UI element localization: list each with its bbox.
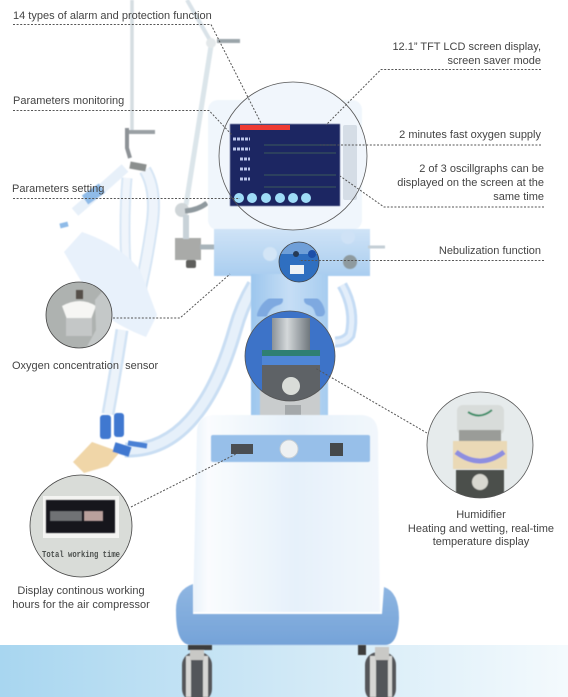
label: oscillographs: same time [493, 191, 544, 203]
breathing tubes [60, 165, 352, 450]
callout: working hours display photo: Total working time [42, 549, 120, 560]
label: LCD screen: screen saver mode [447, 55, 541, 67]
label: humidifier: temperature display [433, 536, 530, 548]
callout: humidifier photo [427, 392, 533, 500]
callout circle: touch screen [219, 82, 367, 230]
bottom gradient band [0, 645, 568, 697]
label: nebulization: Nebulization function [439, 245, 541, 257]
left caster [182, 645, 212, 697]
label: alarm function: 14 types of alarm and protection function [13, 10, 212, 22]
waveforms [264, 145, 336, 187]
label: parameters monitoring: Parameters monitoring [13, 95, 124, 107]
humidifier body [260, 362, 320, 426]
label: LCD screen: 12.1” TFT LCD screen display, [392, 41, 541, 53]
alarm bar [240, 125, 290, 130]
label: oxygen sensor: Oxygen concentration sensor [12, 360, 158, 372]
ventilator machine [60, 0, 399, 697]
callout: oxygen sensor photo [46, 280, 112, 350]
side fittings [263, 230, 385, 269]
support arms and hanger [127, 0, 240, 268]
monitor head [208, 100, 362, 230]
label: parameters setting: Parameters setting [12, 183, 104, 195]
callout: working hours display photo [30, 475, 132, 577]
callout circle: nebulization [279, 242, 319, 282]
label: working hours: hours for the air compressor [12, 599, 150, 611]
label: oscillographs: 2 of 3 oscillgraphs can be [419, 163, 544, 175]
Y connector [73, 413, 147, 473]
blue skirt [176, 584, 399, 645]
label: humidifier: Humidifier [456, 509, 506, 521]
hour meter [231, 444, 253, 454]
label: oscillographs: displayed on the screen at the [397, 177, 544, 189]
blue neck unit [214, 229, 370, 276]
breathing bag [64, 232, 157, 337]
dashed leader lines [13, 24, 544, 507]
pressure gauge [280, 440, 298, 458]
right caster [358, 645, 396, 697]
power switch [330, 443, 343, 456]
label: humidifier: Heating and wetting, real-time [408, 523, 554, 535]
central column [251, 274, 328, 419]
base control panel [211, 435, 370, 462]
label: working hours: Display continous working [17, 585, 145, 597]
parameter readouts [233, 139, 250, 179]
side keys [343, 125, 357, 200]
label: oxygen supply: 2 minutes fast oxygen supply [399, 129, 541, 141]
base cabinet [193, 415, 380, 612]
lower hoses [262, 300, 320, 315]
setting buttons [234, 193, 311, 203]
callout circle: humidifier on machine [245, 311, 335, 405]
LCD screen [230, 124, 340, 206]
humidifier display [285, 405, 301, 415]
